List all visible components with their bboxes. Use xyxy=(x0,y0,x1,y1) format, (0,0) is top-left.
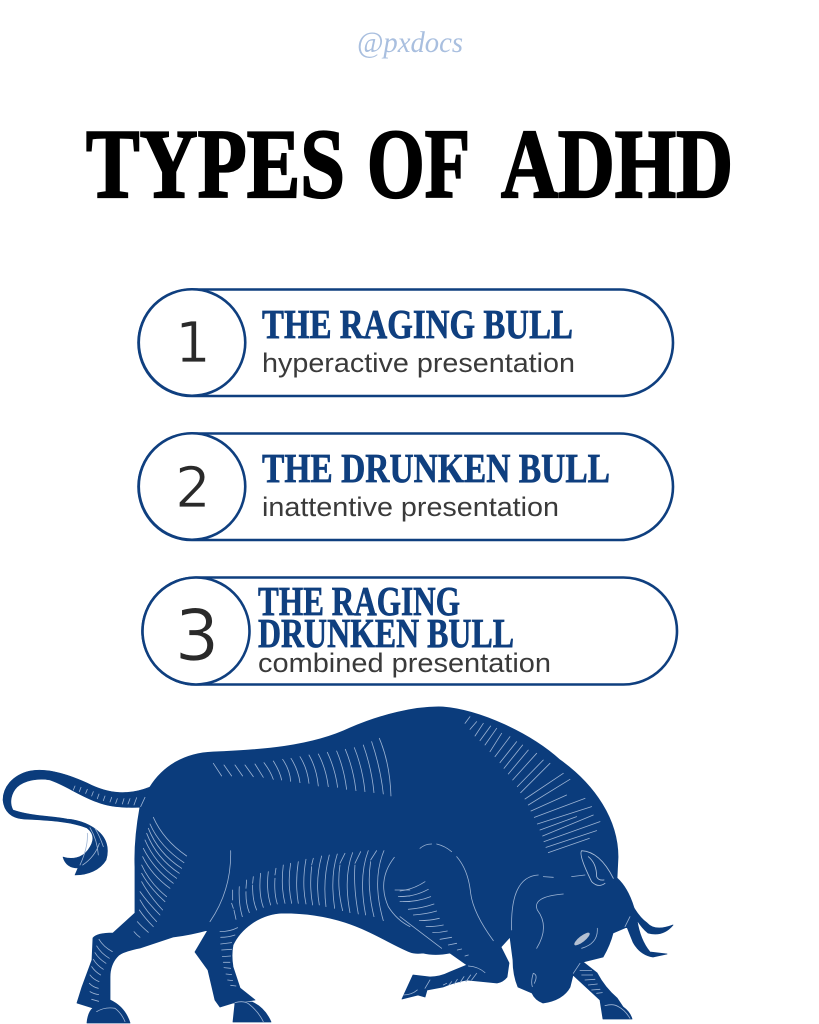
title xyxy=(86,110,733,219)
title: OF xyxy=(367,110,470,219)
bull eye xyxy=(573,931,591,947)
title: TYPES xyxy=(86,110,345,219)
heading: the raging bull: THE RAGING BULL xyxy=(262,301,573,347)
subtitle: combined presentation: combined presentation xyxy=(258,648,551,678)
number badge 1: 1 xyxy=(175,311,211,376)
panel: type 1 xyxy=(138,289,673,396)
bull body xyxy=(77,707,673,1023)
subtitle: hyperactive presentation: hyperactive presentation xyxy=(262,348,575,378)
hatching: haunch xyxy=(89,817,263,1022)
title: ADHD xyxy=(501,110,733,219)
panel: type 3 xyxy=(142,578,677,684)
illustration: charging bull xyxy=(3,707,673,1023)
number badge 1 xyxy=(139,289,245,396)
bull head details xyxy=(512,875,630,987)
bull ear xyxy=(581,851,613,885)
number badge 2 xyxy=(139,433,245,540)
panel: type 2 xyxy=(138,433,673,540)
subtitle: inattentive presentation: inattentive presentation xyxy=(262,492,559,522)
bull tail xyxy=(3,770,150,875)
heading: the raging drunken bull: THE RAGING xyxy=(258,578,460,624)
hatching: left body and tail xyxy=(73,738,391,865)
number badge 2: 2 xyxy=(175,456,211,521)
number badge 3: 3 xyxy=(175,595,219,677)
heading: the raging drunken bull xyxy=(258,578,514,656)
heading: the raging drunken bull: DRUNKEN BULL xyxy=(258,610,514,656)
number badge 3 xyxy=(142,578,250,684)
heading: the drunken bull: THE DRUNKEN BULL xyxy=(262,445,610,491)
hatching: chest, shoulder and front legs xyxy=(400,844,630,1018)
hatching: neck xyxy=(465,717,600,853)
hatching: belly xyxy=(210,851,410,927)
handle: @pxdocs: @pxdocs xyxy=(357,26,463,59)
